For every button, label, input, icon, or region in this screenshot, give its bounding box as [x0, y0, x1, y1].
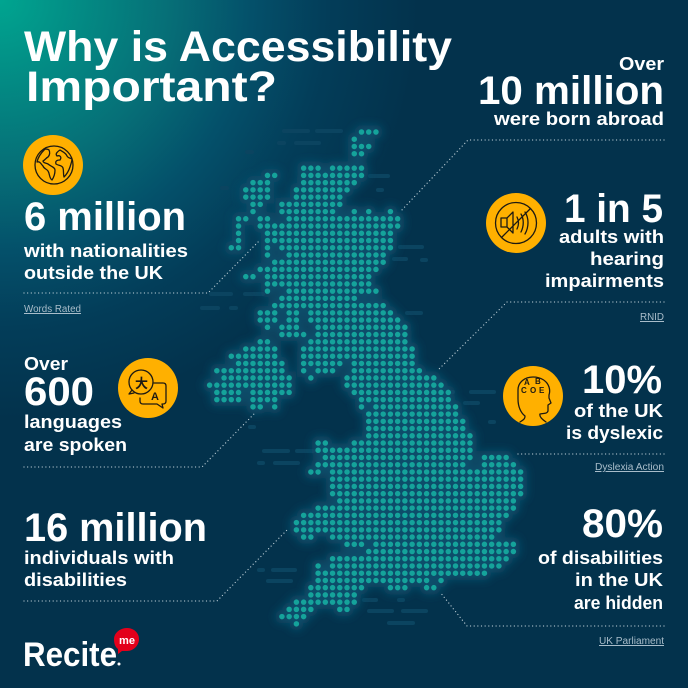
stat: 6 million nationalities: 6 million [24, 195, 186, 239]
stat: 600 languages: are spoken [24, 435, 127, 455]
logo: Recite me: me [119, 635, 135, 647]
stat: 10 million born abroad: 10 million [478, 69, 664, 113]
stat: 10 million born abroad: were born abroad [493, 109, 664, 129]
stat: 80% hidden disabilities: are hidden [574, 593, 663, 613]
dotted map of the UK and Ireland [210, 132, 521, 624]
icon: head with letters: O [530, 386, 536, 395]
stat: 80% hidden disabilities: in the UK [575, 570, 663, 590]
stat: 16 million disabilities: disabilities [24, 570, 127, 590]
icon: globe [23, 135, 83, 195]
stat: 1 in 5 hearing: 1 in 5 [564, 187, 663, 231]
stat: 10% dyslexic: of the UK [574, 401, 663, 421]
icon: translation speech bubbles: A [151, 391, 159, 403]
decorative cloud dashes [200, 129, 496, 625]
title [24, 23, 452, 111]
stat: 600 languages [24, 354, 254, 467]
icon: head with letters: C [521, 386, 527, 395]
icon: head with letters: E [539, 386, 545, 395]
icon: translation speech bubbles: 大 [135, 376, 148, 391]
logo: Recite me: Recite [23, 636, 117, 674]
stat: 600 languages: Over [24, 354, 68, 374]
stat: 1 in 5 hearing [437, 187, 664, 371]
icon: translation speech bubbles [118, 358, 178, 418]
stat: 6 million nationalities: with nationalities [23, 241, 188, 261]
stat: 600 languages: languages [24, 412, 122, 432]
source: UK Parliament: UK Parliament [599, 636, 664, 647]
source: Dyslexia Action: Dyslexia Action [595, 462, 664, 473]
stat: 80% hidden disabilities: 80% [582, 502, 663, 546]
stat: 80% hidden disabilities [440, 502, 664, 626]
stat: 1 in 5 hearing: adults with [559, 227, 664, 247]
stat: 16 million disabilities: 16 million [24, 506, 207, 550]
stat: 16 million disabilities: individuals with [24, 548, 174, 568]
source: RNID: RNID [640, 312, 664, 323]
stat: 600 languages: 600 [24, 370, 94, 414]
stat: 6 million nationalities: outside the UK [24, 263, 163, 283]
icon: head with letters [503, 366, 563, 426]
icon: head with letters: A [524, 378, 530, 387]
stat: 10 million born abroad [400, 54, 664, 212]
stat: 6 million nationalities [23, 195, 260, 293]
stat: 16 million disabilities [24, 506, 289, 601]
icon: head with letters: B [535, 377, 541, 386]
source: Words Rated: Words Rated [24, 304, 81, 315]
stat: 1 in 5 hearing: hearing [590, 249, 664, 269]
stat: 80% hidden disabilities: of disabilities [538, 548, 663, 568]
stat: 10 million born abroad: Over [619, 54, 664, 74]
stat: 10% dyslexic: is dyslexic [566, 423, 663, 443]
title: Why is Accessibility [24, 23, 452, 71]
title: Important? [26, 63, 277, 111]
stat: 1 in 5 hearing: impairments [545, 271, 664, 291]
stat: 10% dyslexic [515, 358, 664, 454]
icon: muted speaker [486, 193, 546, 253]
stat: 10% dyslexic: 10% [582, 358, 662, 402]
